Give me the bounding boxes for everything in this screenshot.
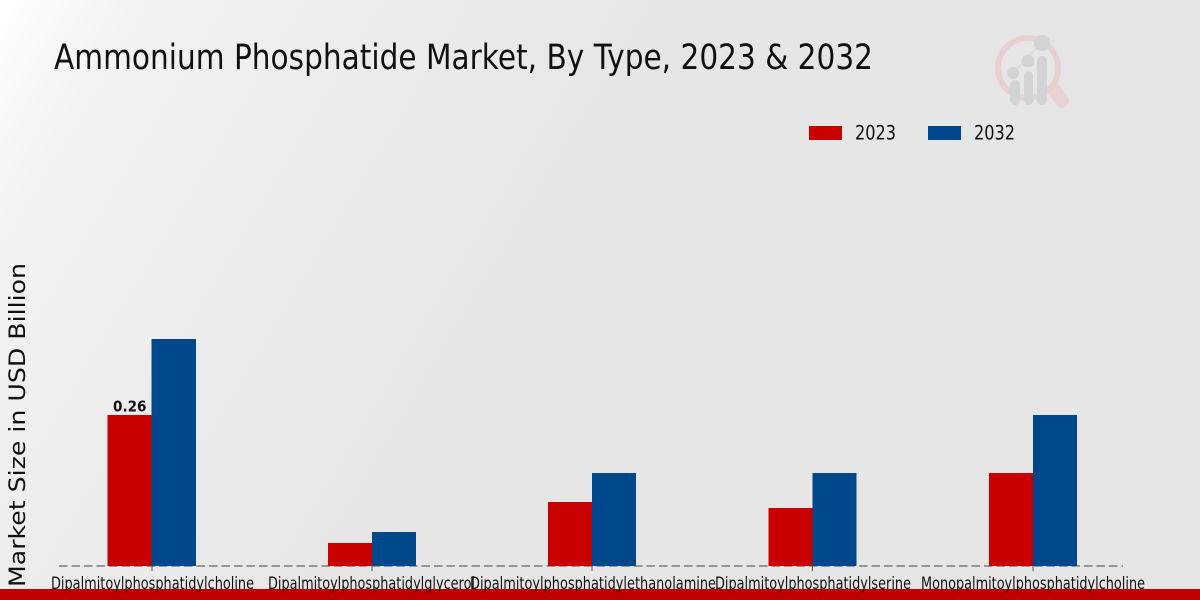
group: Dipalmitoylphosphatidylglycerol [328,532,416,571]
legend [809,122,1015,144]
label: Dipalmitoylphosphatidylcholine: Dipalmitoylphosphatidylcholine [51,574,254,593]
label: Monopalmitoylphosphatidylcholine: Monopalmitoylphosphatidylcholine [921,574,1145,593]
group: Monopalmitoylphosphatidylcholine [989,415,1077,571]
group: Dipalmitoylphosphatidylethanolamine [548,473,636,571]
label: Dipalmitoylphosphatidylserine: Dipalmitoylphosphatidylserine [715,574,911,593]
legend swatch: 2023 [809,126,842,140]
category labels [51,574,1145,593]
value label: 0.26: 0.26 [113,398,146,416]
label: Dipalmitoylphosphatidylglycerol: Dipalmitoylphosphatidylglycerol [268,574,475,593]
legend swatch: 2032 [928,126,961,140]
title: Ammonium Phosphatide Market, By Type, 2023 & 2032 [54,38,873,78]
footer bar [0,589,1200,600]
icon: magnifier logo watermark [998,35,1062,105]
legend label: 2032: 2032 [974,122,1015,144]
legend label: 2023: 2023 [855,122,896,144]
bar chart [59,339,1123,571]
baseline [59,565,1123,567]
group: Dipalmitoylphosphatidylserine [768,473,856,571]
y-axis label: Market Size in USD Billion [5,263,31,587]
group: Dipalmitoylphosphatidylcholine [108,339,196,571]
label: Dipalmitoylphosphatidylethanolamine: Dipalmitoylphosphatidylethanolamine [470,574,716,593]
